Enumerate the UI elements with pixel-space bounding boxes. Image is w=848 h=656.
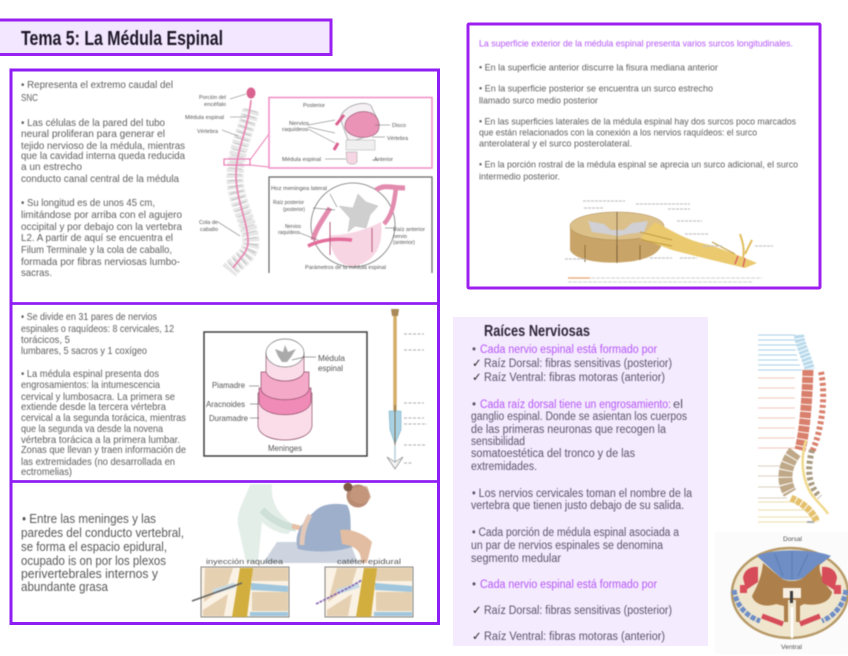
text block: nerve root details: •	[472, 579, 476, 591]
text block: nerves and enlargements: espinales o raquídeos: 8 cervicales, 12	[21, 323, 174, 335]
diagram: meninges: Duramadre	[209, 413, 248, 423]
panel: left main frame	[11, 70, 438, 624]
text block: nerves and enlargements: ectromelias)	[21, 466, 72, 478]
diagram: spinal cord tract cross section: Ventral	[781, 645, 802, 651]
text block: nerve root details: vertebra que tienen justo debajo de su salida.	[471, 500, 684, 512]
text block: nerve root details: • Los nervios cervicales toman el nombre de la	[472, 488, 693, 500]
text block: nerves and enlargements: las extremidades (no desarrollada en	[21, 456, 175, 468]
text block: spinal cord description: L2. A partir de aquí se encuentra el	[21, 232, 173, 244]
text block: nerve root details: Cada raíz dorsal tiene un engrosamiento:	[480, 399, 671, 411]
illustration: spinal cord with filum terminale	[387, 309, 427, 469]
text block: nerve root details: Raíz Dorsal: fibras sensitivas (posterior)	[484, 358, 672, 370]
title banner: Tema 5: La Médula Espinal	[21, 28, 223, 50]
text block: sulci list: llamado surco medio posterior	[479, 96, 598, 106]
text block: spinal cord description: formada por fibras nerviosas lumbo-	[21, 256, 180, 268]
text block: nerves and enlargements: Zonas que llevan y traen información de	[21, 444, 186, 456]
text block: nerve root details: Cada nervio espinal está formado por	[480, 344, 657, 356]
text block: epidural space: ocupado is on por los plexos	[21, 553, 166, 568]
text block: nerve root details: extremidades.	[471, 461, 537, 473]
text block: nerves and enlargements: cervical a la segunda torácica, mientras	[21, 412, 186, 424]
diagram: spinal segment in gray frame	[269, 177, 432, 273]
diagram: spinal cord segment with nerve	[565, 201, 773, 268]
illustration: nurse and patient epidural: inyección raquídea	[206, 557, 284, 566]
diagram: spinal segment in gray frame: (posterior)	[283, 207, 305, 213]
text block: spinal cord description: limitándose por arriba con el agujero	[21, 209, 182, 221]
diagram: vertebra cross section in pink frame: Nervios	[289, 121, 310, 127]
text block: nerve root details: sensibilidad	[471, 436, 525, 448]
text block: spinal cord description	[21, 79, 185, 279]
text block: nerve root details: ganglio espinal. Donde se asientan los cuerpos	[471, 411, 687, 423]
diagram: spinal segment in gray frame: Nervios	[285, 224, 301, 230]
diagram: epidural catheter inset	[316, 567, 413, 617]
text block: epidural space: paredes del conducto vertebral,	[21, 525, 184, 540]
illustration: nurse and patient epidural	[206, 482, 401, 566]
text block: epidural space	[21, 511, 184, 594]
text block: sulci list: intermedio posterior.	[479, 172, 560, 182]
heading: longitudinal sulci: La superficie exterior de la médula espinal presenta varios surcos longitudinales.	[479, 38, 793, 50]
text block: nerve root details: de las primeras neuronas que recogen la	[471, 424, 667, 436]
text block: spinal cord description: occipital y por debajo con la vertebra	[21, 221, 182, 233]
diagram: vertebra cross section in pink frame: Disco	[392, 123, 406, 129]
diagram: spinal cord tract cross section: Dorsal	[783, 537, 802, 543]
text block: nerves and enlargements: que la segunda va desde la novena	[21, 423, 163, 435]
diagram: vertebra cross section in pink frame: raquídeos	[282, 127, 309, 133]
diagram: spinal segment in gray frame: Raíz posterior	[273, 200, 304, 206]
diagram: meninges: Médula	[318, 353, 345, 363]
heading: Raíces Nerviosas: Raíces Nerviosas	[484, 323, 590, 340]
text block: nerve root details: ✓	[472, 358, 482, 370]
text block: nerve root details: Cada nervio espinal está formado por	[480, 579, 657, 591]
text block: epidural space: abundante grasa	[21, 579, 109, 594]
text block: sulci list: • En la superficie anterior discurre la fisura mediana anterior	[479, 62, 718, 74]
diagram: vertebra cross section in pink frame: Posterior	[303, 103, 325, 109]
diagram: meninges: Piamadre	[212, 380, 245, 390]
diagram: spinal segment in gray frame: Hoz meningea lateral	[271, 186, 327, 192]
figure caption	[568, 278, 762, 282]
panel: nerve roots	[453, 317, 708, 646]
diagram: spinal injection inset	[192, 567, 289, 617]
text block: sulci list: que están relacionados con la conexión a los nervios raquídeos: el surco	[479, 128, 757, 138]
diagram: vertebra cross section in pink frame: Vértebra	[387, 136, 408, 142]
text block: nerve root details: Raíz Ventral: fibras motoras (anterior)	[484, 372, 665, 384]
text block: sulci list: • En la porción rostral de la médula espinal se aprecia un surco adicional, el surco	[479, 160, 798, 170]
text block: spinal cord description: SNC	[21, 92, 38, 104]
title banner	[0, 20, 331, 54]
text block: spinal cord description: • Las células de la pared del tubo	[21, 117, 165, 129]
text block: nerves and enlargements: • La médula espinal presenta dos	[21, 368, 159, 380]
text block: spinal cord description: tejido nervioso de la médula, mientras	[21, 140, 185, 152]
illustration: lateral spinal column: caballo	[200, 227, 218, 233]
text block: sulci list	[479, 62, 798, 182]
illustration: lateral spinal column: encéfalo	[204, 102, 226, 108]
text block: nerve root details: Raíz Dorsal: fibras sensitivas (posterior)	[484, 605, 672, 617]
text block: nerves and enlargements: • Se divide en 31 pares de nervios	[21, 311, 157, 323]
text block: nerve root details: segmento medular	[471, 553, 561, 565]
diagram: meninges: espinal	[318, 363, 343, 373]
text block: nerves and enlargements: torácicos, 5	[21, 334, 70, 346]
diagram: spinal segment in gray frame: Raíz anterior	[393, 227, 425, 233]
text block: nerve root details	[471, 344, 693, 643]
diagram: meninges: Meninges	[268, 443, 302, 453]
text block: nerves and enlargements	[21, 311, 186, 478]
diagram: spinal segment in gray frame: Parámetros de la médula espinal	[305, 265, 386, 271]
diagram: spinal segment in gray frame: raquídeos	[278, 230, 300, 236]
diagram: meninges	[204, 332, 367, 456]
diagram: vertebra cross section in pink frame: Médula espinal	[282, 157, 321, 163]
text block: spinal cord description: • Representa el extremo caudal del	[21, 79, 173, 91]
illustration: spinal nerve levels by region	[758, 335, 828, 522]
text block: nerve root details: somatoestética del tronco y de las	[471, 448, 635, 460]
text block: epidural space: perivertebrales internos y	[21, 566, 158, 581]
diagram: spinal segment in gray frame: (anterior)	[393, 240, 415, 246]
text block: spinal cord description: sacras.	[21, 267, 52, 279]
text block: sulci list: anterolateral y el surco posterolateral.	[479, 138, 632, 150]
illustration: lateral spinal column	[185, 88, 269, 271]
text block: nerves and enlargements: cervical y lumbosacra. La primera se	[21, 391, 175, 403]
text block: nerve root details: ✓	[472, 605, 482, 617]
text block: spinal cord description: conducto canal central de la médula	[21, 173, 179, 185]
text block: epidural space: • Entre las meninges y las	[22, 511, 156, 526]
text block: nerve root details: • Cada porción de médula espinal asociada a	[472, 527, 680, 539]
text block: spinal cord description: • Su longitud es de unos 45 cm,	[21, 197, 155, 209]
diagram: vertebra cross section in pink frame	[269, 98, 432, 168]
illustration: lateral spinal column: Médula espinal	[185, 115, 224, 121]
text block: nerves and enlargements: lumbares, 5 sacros y 1 coxígeo	[21, 345, 147, 357]
text block: nerve root details: ✓	[472, 372, 482, 384]
diagram: spinal segment in gray frame: nervio	[393, 234, 407, 240]
diagram: vertebra cross section in pink frame: Anterior	[374, 157, 393, 163]
text block: spinal cord description: neural proliferan para generar el	[21, 128, 165, 140]
text block: nerve root details: •	[472, 344, 476, 356]
text block: spinal cord description: a un estrecho	[21, 161, 82, 173]
illustration: lateral spinal column: Vértebra	[197, 129, 218, 135]
text block: nerve root details: •	[472, 399, 476, 411]
illustration: nurse and patient epidural: catéter epidural	[337, 557, 401, 566]
illustration: lateral spinal column: Cola de	[199, 220, 218, 226]
text block: nerve root details: el	[673, 399, 683, 411]
text block: nerve root details: un par de nervios espinales se denomina	[471, 540, 664, 552]
diagram: meninges: Aracnoides	[206, 399, 245, 409]
text block: nerve root details: Raíz Ventral: fibras motoras (anterior)	[484, 631, 665, 643]
text block: nerves and enlargements: vértebra torácica a la primera lumbar.	[21, 434, 180, 446]
diagram: spinal cord tract cross section	[715, 532, 848, 654]
panel: exterior sulci of the spinal cord	[468, 24, 820, 288]
text block: nerves and enlargements: engrosamientos: la intumescencia	[21, 379, 160, 391]
illustration: lateral spinal column: Porción del	[199, 95, 226, 101]
text block: epidural space: se forma el espacio epidural,	[21, 539, 167, 554]
text block: spinal cord description: que la cavidad interna queda reducida	[21, 150, 185, 162]
text block: nerve root details: ✓	[472, 631, 482, 643]
text block: sulci list: • En la superficie posterior se encuentra un surco estrecho	[479, 84, 713, 94]
text block: sulci list: • En las superficies laterales de la médula espinal hay dos surcos poco marcados	[479, 116, 796, 128]
text block: nerves and enlargements: extiende desde la tercera vértebra	[21, 401, 166, 413]
text block: spinal cord description: Filum Terminale y la cola de caballo,	[21, 244, 172, 256]
